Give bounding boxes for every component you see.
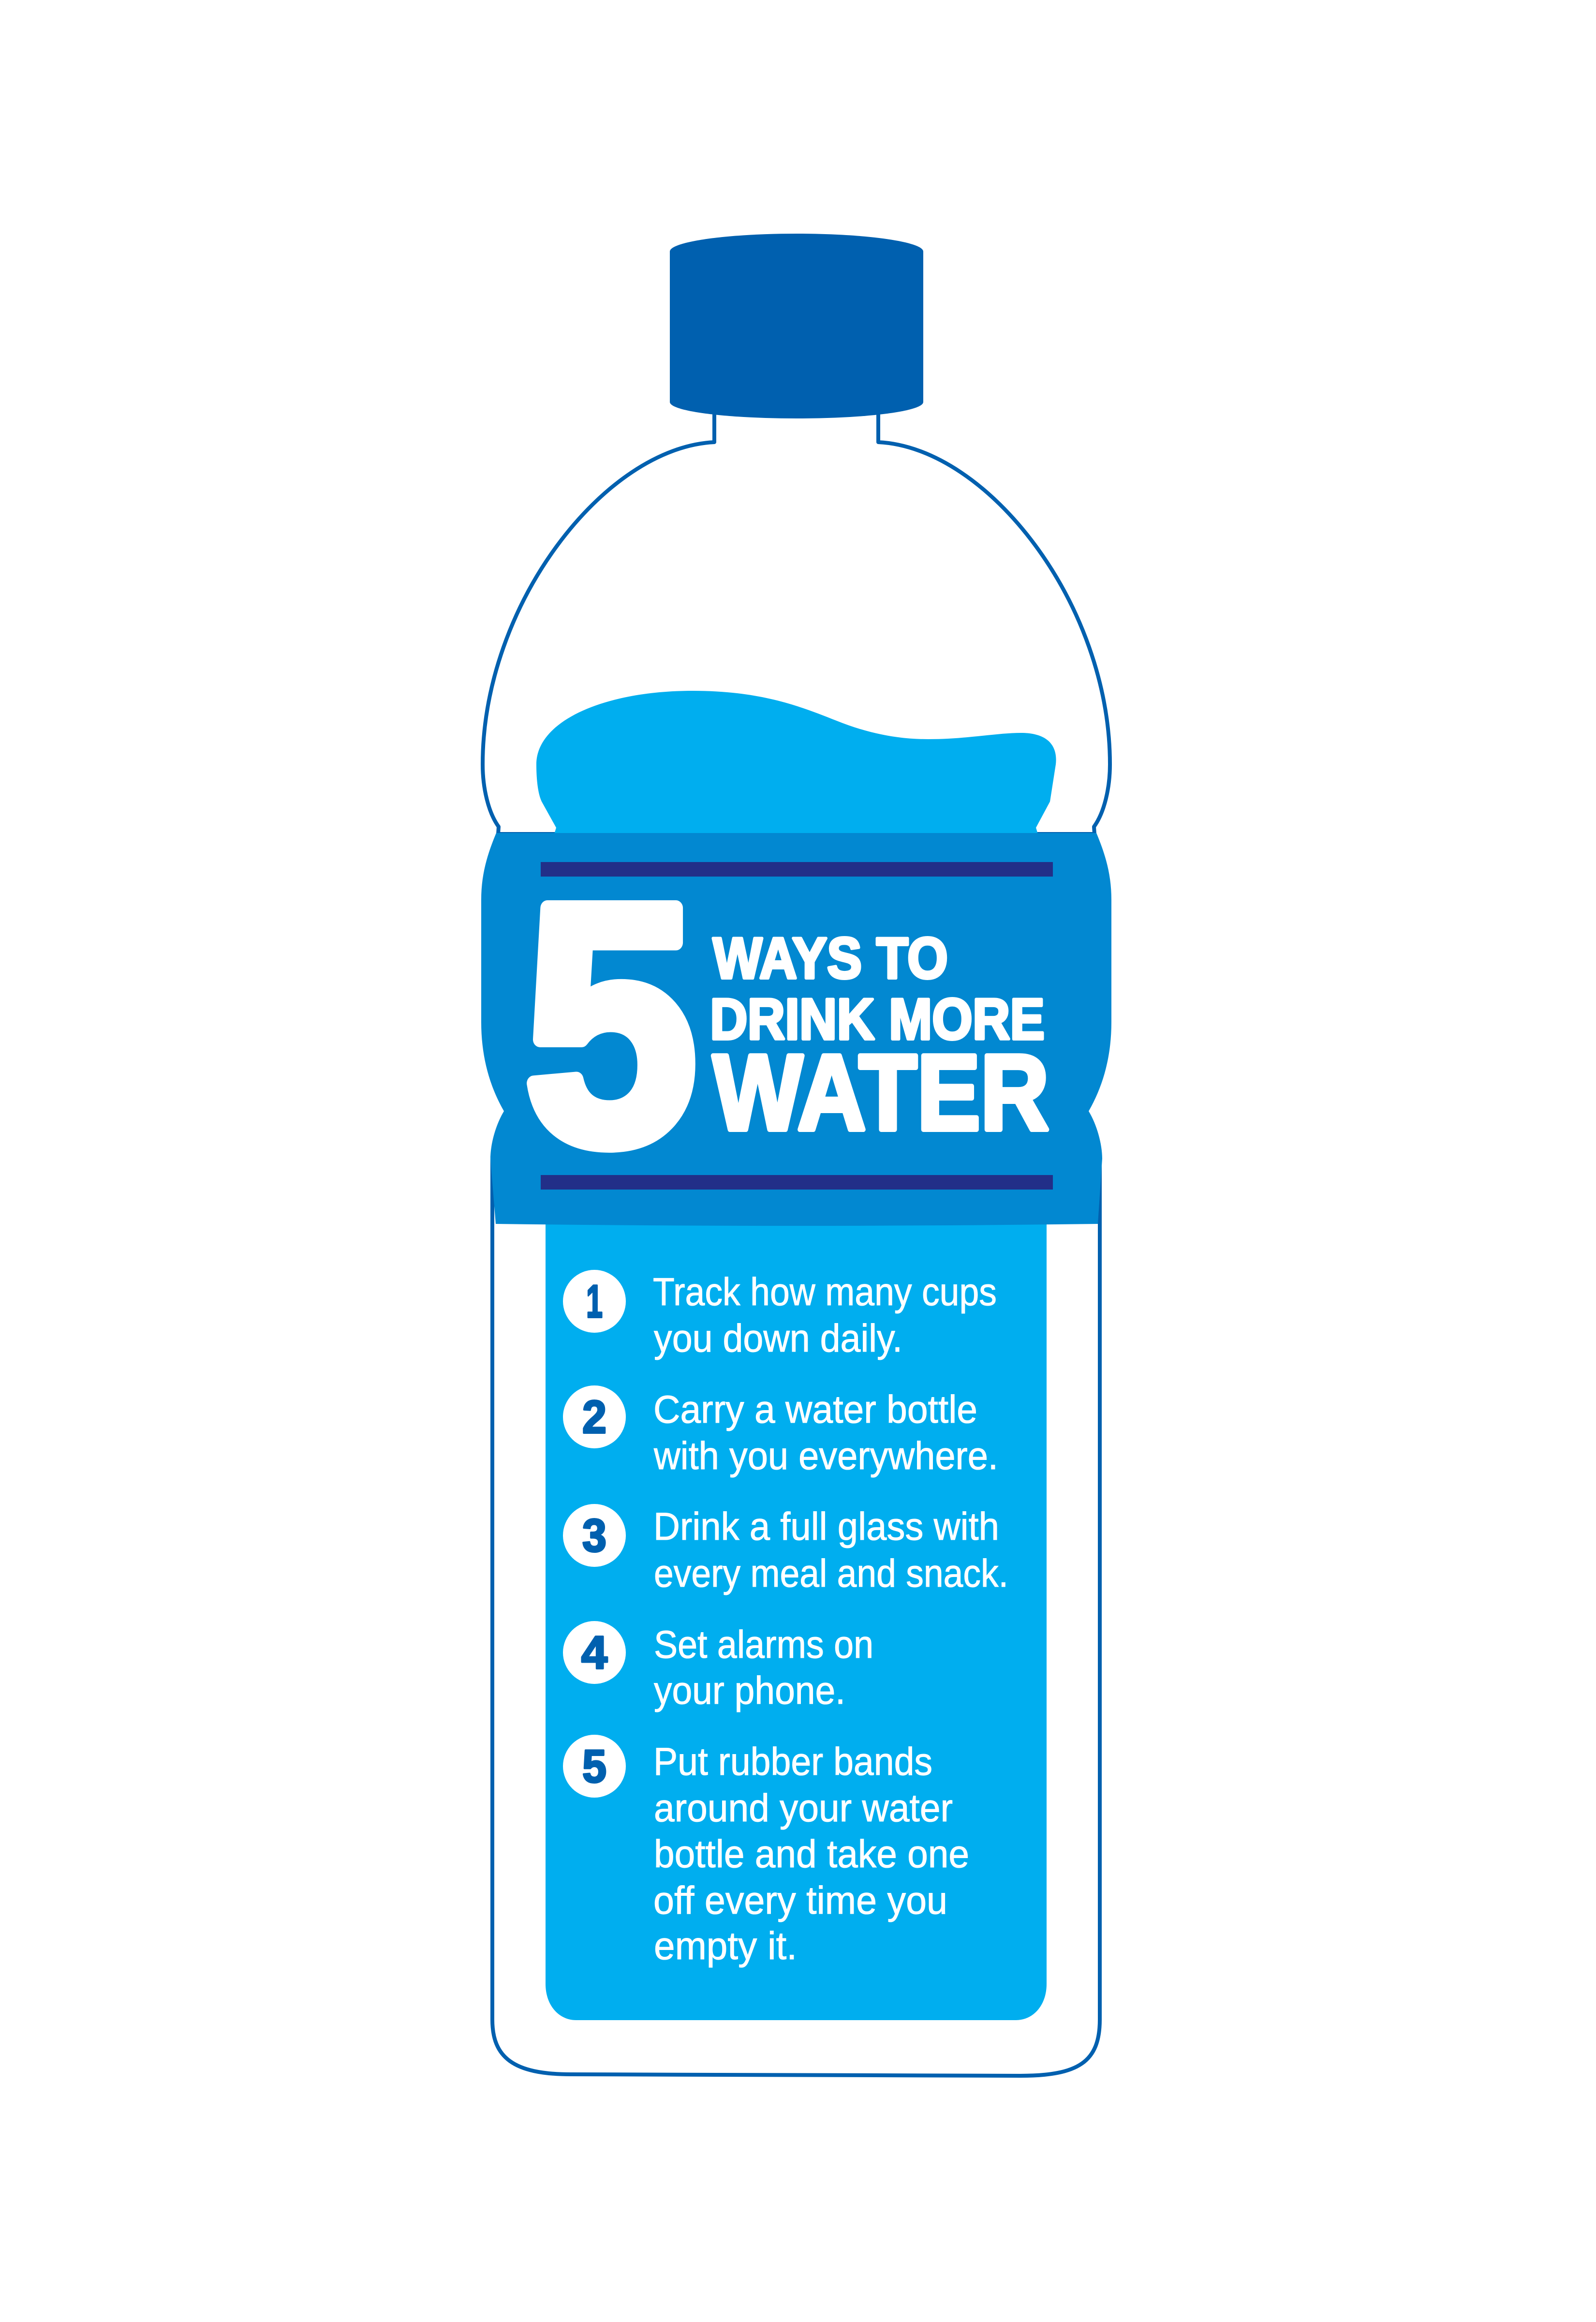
water in bottle top xyxy=(536,691,1056,834)
tip 1 text: you down daily. xyxy=(654,1317,902,1360)
bottom label bar xyxy=(541,1175,1053,1190)
title line: drink more: DRINK MORE xyxy=(710,987,1045,1052)
tip 5 text: empty it. xyxy=(654,1924,797,1968)
tip 5 text: off every time you xyxy=(653,1879,947,1922)
tip 5 xyxy=(563,1735,969,1968)
number badge 4: 4 xyxy=(581,1627,607,1679)
panel: tips list xyxy=(546,1219,1047,2020)
tips panel background xyxy=(546,1219,1047,2020)
tip 5 text: around your water xyxy=(654,1786,953,1830)
tip 2 text: with you everywhere. xyxy=(653,1434,998,1478)
title line: water: WATER xyxy=(713,1033,1049,1153)
tip 1 xyxy=(563,1270,997,1360)
title line: ways to: WAYS TO xyxy=(713,926,948,991)
number badge 5: 5 xyxy=(582,1741,606,1792)
tip 4 text: your phone. xyxy=(654,1669,845,1712)
tip 1 text xyxy=(653,1270,997,1360)
number badge 2 xyxy=(563,1385,626,1448)
number badge 5 xyxy=(563,1735,626,1798)
tip 2 xyxy=(563,1385,998,1478)
tip 5 text: bottle and take one xyxy=(654,1832,969,1876)
top label bar xyxy=(541,862,1053,877)
tip 5 text: Put rubber bands xyxy=(653,1740,932,1784)
tip 4 text: Set alarms on xyxy=(654,1623,873,1667)
title xyxy=(710,926,1049,1153)
number badge 2: 2 xyxy=(582,1391,606,1443)
number badge 1 xyxy=(563,1270,626,1333)
tip 3 text xyxy=(653,1505,1008,1595)
number badge 4 xyxy=(563,1621,626,1684)
tip 4 xyxy=(563,1621,873,1712)
bottle body outline xyxy=(492,1156,1100,2076)
tip 2 text: Carry a water bottle xyxy=(653,1388,977,1431)
tip 4 text xyxy=(654,1623,873,1712)
big numeral 5: 5 xyxy=(524,834,697,1214)
bottle shoulder outline xyxy=(483,411,1110,834)
panel: bottle label xyxy=(481,833,1111,1226)
label background xyxy=(481,833,1111,1226)
bottle cap xyxy=(670,234,923,418)
tip 2 text xyxy=(653,1388,998,1478)
number badge 3: 3 xyxy=(582,1510,606,1562)
number badge 1: 1 xyxy=(586,1276,603,1327)
tip 1 text: Track how many cups xyxy=(653,1270,997,1314)
tip 3 text: Drink a full glass with xyxy=(653,1505,999,1548)
number badge 3 xyxy=(563,1504,626,1567)
tip 5 text xyxy=(653,1740,969,1968)
tip 3 text: every meal and snack. xyxy=(654,1552,1008,1595)
tip 3 xyxy=(563,1504,1008,1595)
